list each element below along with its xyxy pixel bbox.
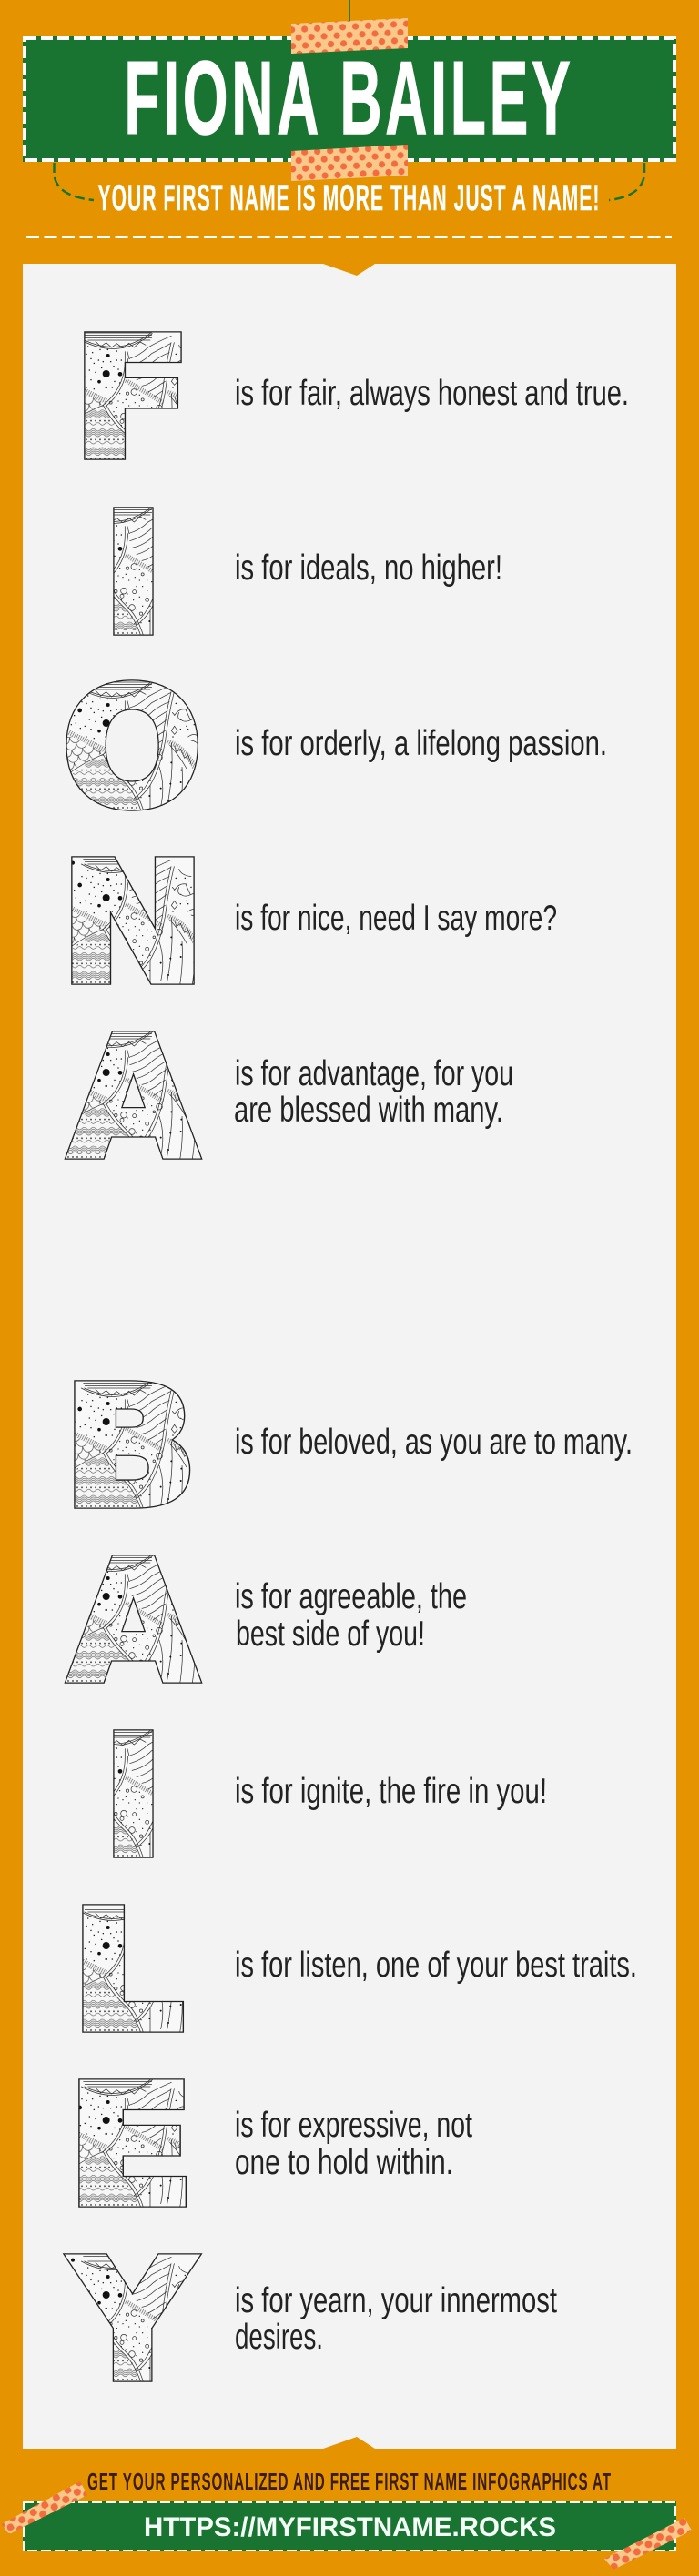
text: E: is for expressive, not xyxy=(235,2106,472,2145)
letter A xyxy=(64,1555,203,1684)
text: E: one to hold within. xyxy=(235,2143,453,2182)
letter E: E xyxy=(66,2050,196,2243)
letter A: A xyxy=(69,1525,198,1718)
letter N xyxy=(71,856,195,985)
tape: top xyxy=(291,18,408,54)
row: E xyxy=(78,2078,472,2208)
letter L: L xyxy=(70,1875,185,2068)
connector right xyxy=(609,163,644,200)
text: A: best side of you! xyxy=(236,1615,425,1654)
panel: footer xyxy=(2,2468,692,2570)
text: A xyxy=(234,1054,513,1130)
url banner xyxy=(23,2501,676,2551)
letter I: I xyxy=(102,1702,165,1894)
text: A: are blessed with many. xyxy=(234,1091,503,1130)
letter I xyxy=(113,507,154,636)
row: O xyxy=(66,679,604,811)
text: Y xyxy=(235,2281,557,2357)
letter L xyxy=(82,1904,184,2033)
panel: header xyxy=(23,0,676,236)
row: A second xyxy=(64,1555,466,1684)
tape: bottom xyxy=(291,145,408,181)
letter B: B xyxy=(62,1351,198,1544)
text: I: is for ideals, no higher! xyxy=(235,548,502,588)
letter O xyxy=(66,679,198,811)
letter B xyxy=(74,1380,191,1509)
row: Y xyxy=(62,2253,557,2382)
row: I xyxy=(113,507,501,636)
text: A: is for advantage, for you xyxy=(235,1054,513,1093)
letter A: A xyxy=(69,1001,198,1194)
text: E xyxy=(235,2106,472,2182)
tape: left xyxy=(2,2481,87,2534)
url: HTTPS://MYFIRSTNAME.ROCKS xyxy=(144,2512,556,2542)
letter F: F xyxy=(72,304,192,496)
row: L xyxy=(82,1904,635,2033)
text: A xyxy=(235,1577,467,1654)
letter I xyxy=(113,1729,154,1858)
letter I: I xyxy=(102,479,165,671)
letter Y xyxy=(62,2253,202,2382)
row: B xyxy=(74,1380,630,1509)
letter F xyxy=(84,331,182,460)
row: I second xyxy=(113,1729,544,1858)
row: N xyxy=(71,856,556,985)
text: I: is for ignite, the fire in you! xyxy=(235,1772,547,1811)
letter N: N xyxy=(59,828,207,1021)
text: N: is for nice, need I say more? xyxy=(235,899,557,938)
hanging string xyxy=(349,0,350,24)
letter A xyxy=(64,1031,203,1160)
row: A xyxy=(64,1031,512,1160)
text: Y: desires. xyxy=(235,2318,323,2357)
letter E xyxy=(78,2078,187,2208)
row: F xyxy=(84,331,626,460)
letter O: O xyxy=(62,653,203,843)
panel: letters background xyxy=(23,264,676,2449)
tape: right xyxy=(604,2518,692,2570)
letter Y: Y xyxy=(70,2225,196,2418)
text: Y: is for yearn, your innermost xyxy=(235,2281,557,2320)
title banner xyxy=(23,36,676,162)
text: A: is for agreeable, the xyxy=(235,1577,467,1616)
connector left xyxy=(55,163,94,200)
